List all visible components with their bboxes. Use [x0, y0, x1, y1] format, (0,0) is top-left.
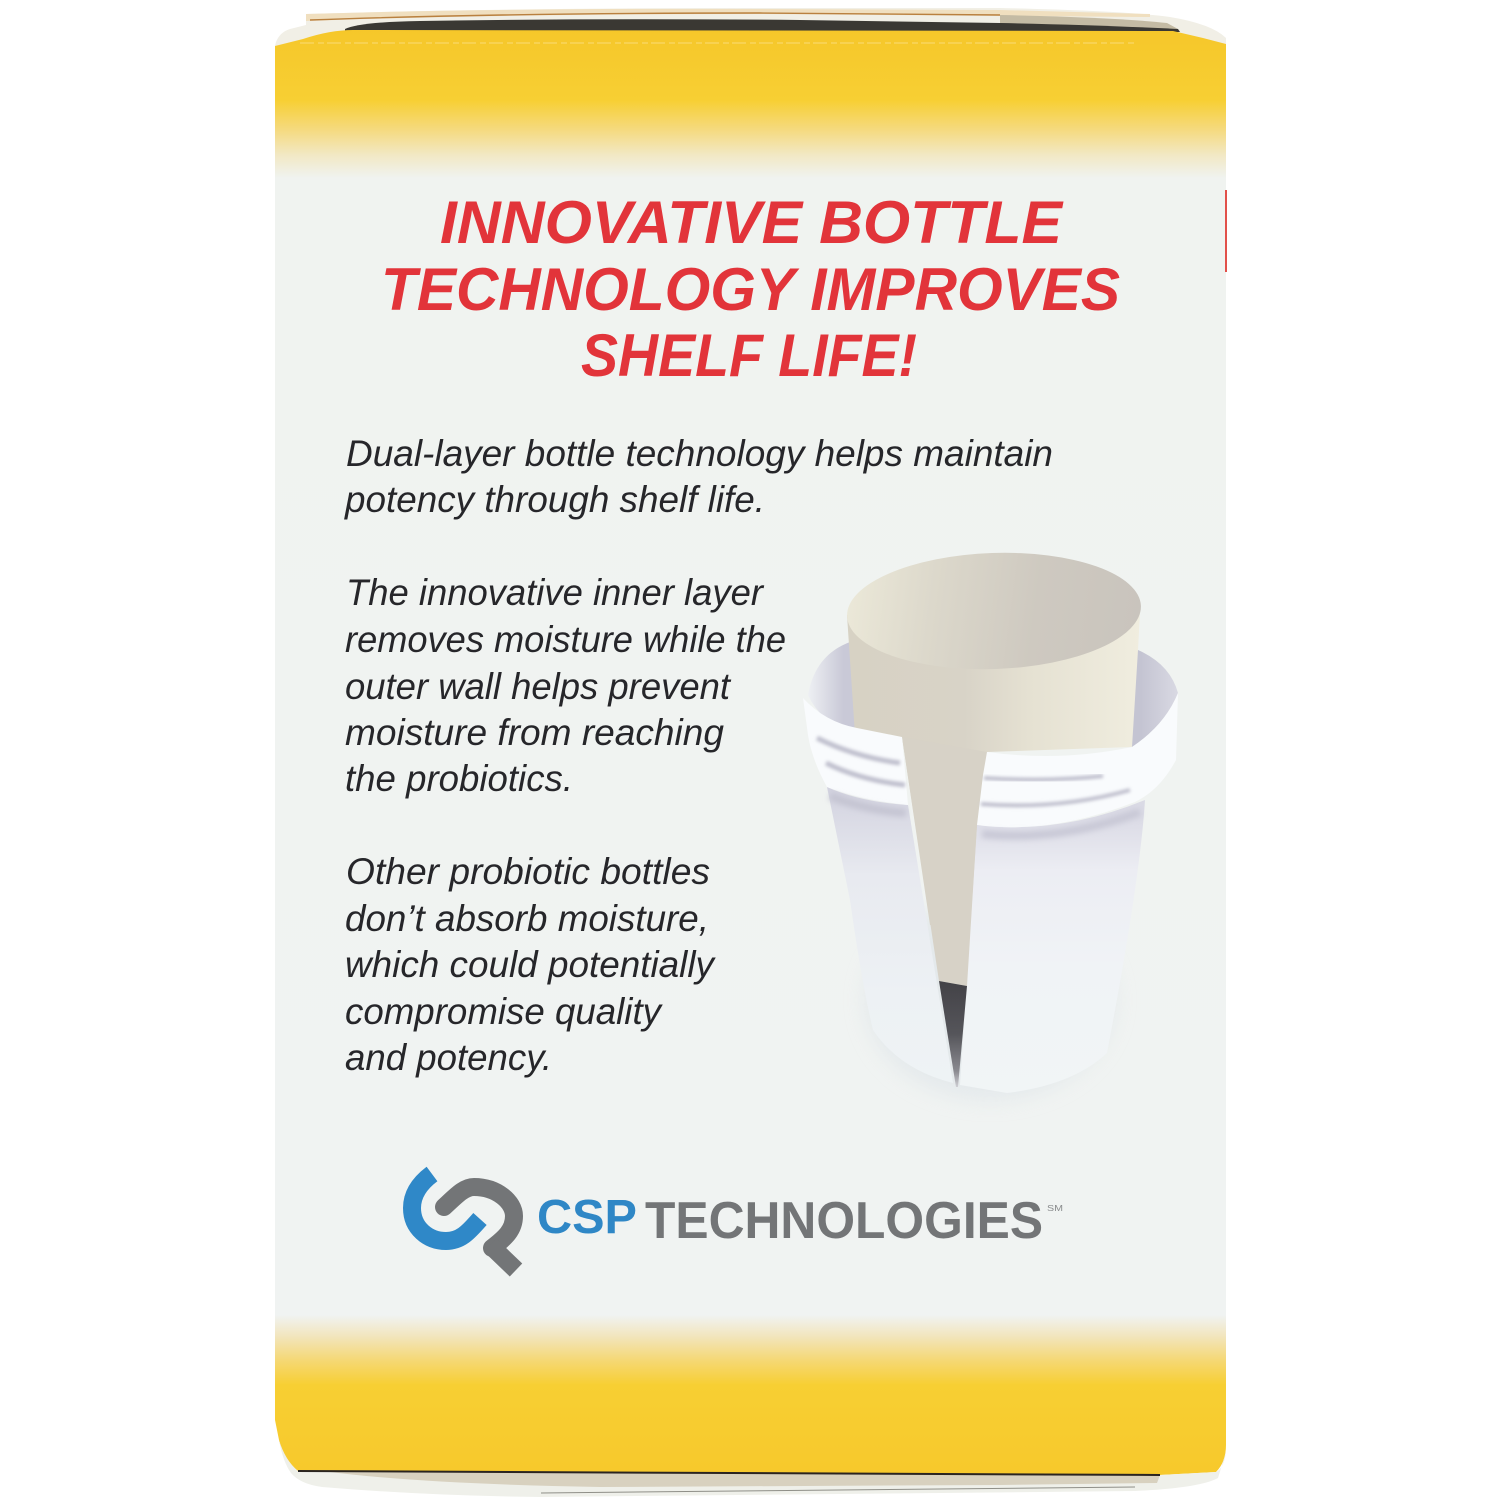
central wedge showing inner layer [902, 737, 987, 986]
text block: other bottles [345, 851, 716, 1078]
red side edge [1225, 190, 1227, 272]
left threads [803, 698, 908, 813]
text block: other bottles: don’t absorb moisture, [345, 898, 709, 939]
text block: inner layer: outer wall helps prevent [345, 666, 732, 707]
inner layer sleeve [847, 612, 1140, 925]
logo: CSP Technologies [412, 1174, 1063, 1270]
wordmark CSP: CSP [537, 1191, 637, 1244]
text block: inner layer: removes moisture while the [345, 619, 786, 660]
outer bottle opening [808, 642, 1178, 747]
service mark: SM [1047, 1204, 1063, 1213]
text block: dual-layer: potency through shelf life. [344, 479, 765, 520]
text block: inner layer: the probiotics. [345, 758, 573, 799]
right bottle body [960, 800, 1145, 1093]
text block: inner layer: moisture from reaching [345, 712, 724, 753]
illustration: dual-layer bottle cutaway [803, 548, 1178, 1100]
text block: other bottles: compromise quality [345, 991, 663, 1032]
text block: other bottles: and potency. [345, 1037, 552, 1078]
title: SHELF LIFE! [581, 322, 917, 389]
title: TECHNOLOGY IMPROVES [381, 256, 1120, 323]
yellow and white panel background [275, 30, 1226, 1475]
metal tip of wedge [939, 981, 967, 1087]
text block: other bottles: Other probiotic bottles [346, 851, 710, 892]
right threads [977, 693, 1178, 836]
text block: other bottles: which could potentially [345, 944, 716, 985]
box top flap edge [275, 8, 1226, 46]
speckled crease line [300, 42, 1135, 44]
text block: dual-layer [344, 433, 1053, 520]
text block: inner layer [345, 572, 786, 799]
icon: linked C and Q mark [412, 1174, 516, 1270]
bottle soft shadow [865, 900, 1115, 1100]
title: INNOVATIVE BOTTLE [440, 189, 1064, 256]
wordmark Technologies: TECHNOLOGIES [645, 1192, 1043, 1250]
text block: inner layer: The innovative inner layer [346, 572, 765, 613]
text block: dual-layer: Dual-layer bottle technology helps maintain [346, 433, 1053, 474]
left bottle body [827, 787, 953, 1083]
box bottom flap edge [279, 1440, 1226, 1497]
title [381, 189, 1120, 389]
inner layer opening [845, 548, 1143, 674]
